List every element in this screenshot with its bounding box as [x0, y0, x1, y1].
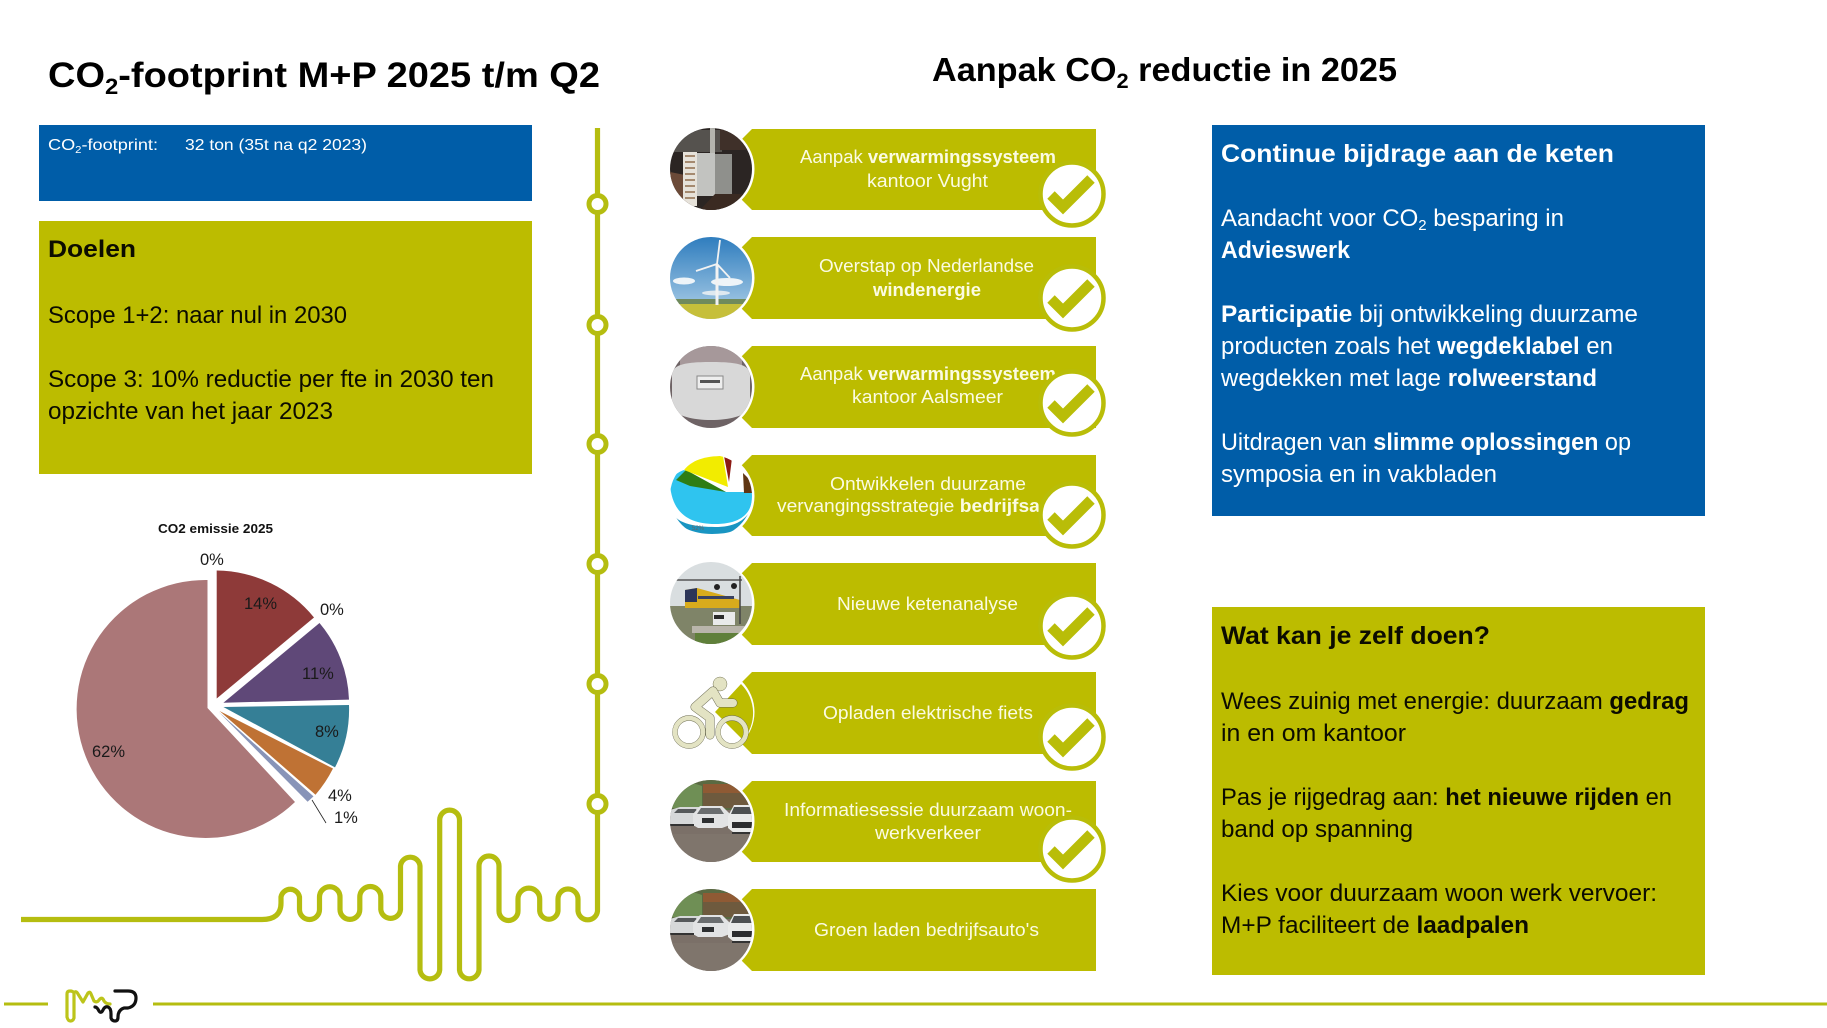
icon: check [1040, 162, 1104, 226]
paragraph: participatie: Participatie bij ontwikkeling duurzame [1221, 301, 1638, 328]
slice 1% [219, 712, 314, 802]
title: Aanpak CO2 reductie: reductie in 2025 [1129, 51, 1397, 88]
card 7: woon-werkverkeer [668, 778, 1104, 880]
paragraph: vervoer [1221, 880, 1657, 939]
footer line right [153, 1002, 1827, 1006]
title: CO2-footprint: CO [48, 56, 100, 95]
paragraph: symposia [1221, 429, 1631, 488]
label [800, 364, 1056, 407]
paragraph: advieswerk: besparing in [1427, 205, 1564, 232]
slice 11% [223, 623, 349, 703]
data labels: 4% [328, 787, 352, 805]
footprint label: 2 [75, 145, 82, 156]
data labels: 11% [302, 665, 334, 683]
card 1: verwarmingssysteem Vught [668, 126, 1104, 226]
label [777, 474, 1085, 516]
data labels [92, 551, 358, 827]
card 4: vervangingsstrategie [668, 452, 1104, 546]
icon: check [1040, 818, 1104, 880]
photo: boiler [670, 346, 752, 428]
label: Informatiesessie duurzaam woon- [784, 800, 1072, 820]
paragraph: vervoer: Kies voor duurzaam woon werk vervoer: [1221, 880, 1657, 907]
timeline wave line [21, 128, 598, 979]
data labels: 0% [200, 551, 224, 569]
label: Ontwikkelen duurzame [830, 474, 1026, 494]
paragraph: gedrag: Wees zuinig met energie: duurzaam gedrag [1221, 688, 1689, 715]
paragraph: gedrag [1221, 688, 1689, 747]
title: CO2-footprint: -footprint M+P 2025 t/m Q2 [118, 56, 600, 95]
card 8: bedrijfsauto's [668, 886, 1096, 974]
text: scope 3 [48, 366, 494, 425]
paragraph: participatie [1220, 301, 1638, 392]
icon: check [1040, 594, 1104, 658]
paragraph: rijgedrag [1221, 784, 1672, 843]
paragraph: rijgedrag: Pas je rijgedrag aan: het nieuwe rijden en [1221, 784, 1672, 811]
label: Groen laden bedrijfsauto's [814, 920, 1039, 940]
footprint value: 32 ton (35t na q2 2023) [185, 137, 367, 154]
label [784, 800, 1072, 843]
label: vervangingsstrategie bedrijfsauto's [777, 496, 1085, 516]
label: werkverkeer [874, 823, 981, 843]
heading: Wat kan je zelf doen? [1221, 622, 1490, 650]
paragraph: advieswerk: Advieswerk [1221, 237, 1351, 264]
paragraph: symposia: Uitdragen van slimme oplossingen op [1221, 429, 1631, 456]
panel: Wat kan je zelf doen [1212, 607, 1705, 975]
heading: Continue bijdrage aan de keten [1221, 140, 1614, 168]
photo: train [670, 562, 752, 646]
timeline nodes [589, 196, 606, 812]
paragraph: advieswerk: Aandacht voor CO [1221, 205, 1418, 232]
data labels: 62% [92, 743, 125, 761]
logo: M+P [67, 991, 136, 1021]
label: kantoor Aalsmeer [852, 387, 1003, 407]
label [819, 256, 1034, 300]
small pie label: 52% [692, 526, 705, 532]
label: Aanpak verwarmingssysteem [800, 147, 1056, 167]
data labels: 8% [315, 723, 339, 741]
card 3: verwarmingssysteem Aalsmeer [668, 344, 1104, 434]
card 6: elektrische fiets [668, 668, 1104, 768]
label [800, 147, 1056, 191]
panel: CO2-footprint value [39, 125, 532, 201]
photo: cars [670, 889, 752, 971]
footprint label: -footprint: [81, 137, 158, 154]
data labels: 0% [320, 601, 344, 619]
photo: wind turbine [670, 237, 752, 319]
label: windenergie [872, 280, 981, 300]
pie chart: CO2 emissie 2025 [77, 522, 358, 838]
card 2: windenergie [668, 234, 1104, 330]
footprint label: CO [48, 137, 72, 154]
photo: cars [670, 780, 752, 862]
slice 8% [223, 705, 349, 767]
icon: check [1040, 484, 1104, 546]
heading: Doelen: Doelen [48, 236, 136, 263]
title: CO2-footprint: 2 [105, 74, 118, 99]
text: scope 3: Scope 3: 10% reductie per fte in 2030 ten [48, 366, 494, 393]
paragraph: rijgedrag: band op spanning [1221, 816, 1413, 843]
image: 3D pie [670, 455, 752, 537]
data labels: 14% [244, 595, 277, 613]
icon: check [1040, 266, 1104, 330]
label: kantoor Vught [867, 171, 988, 191]
paragraph: advieswerk: 2 [1418, 217, 1427, 234]
title: Aanpak CO2 reductie: 2 [1117, 70, 1129, 93]
card 5: ketenanalyse [668, 560, 1104, 658]
label: Overstap op Nederlandse [819, 256, 1034, 276]
label: Aanpak verwarmingssysteem [800, 364, 1056, 384]
panel: Continue bijdrage aan de keten [1212, 125, 1705, 516]
paragraph: symposia: symposia en in vakbladen [1221, 461, 1497, 488]
text: scope 3: opzichte van het jaar 2023 [48, 398, 333, 425]
paragraph: participatie: wegdekken met lage rolweerstand [1220, 365, 1597, 392]
panel: Doelen [39, 221, 532, 474]
paragraph: advieswerk [1221, 205, 1564, 264]
leader line [312, 800, 326, 823]
text: scope 1+2: Scope 1+2: naar nul in 2030 [48, 302, 347, 329]
footer line left [4, 1002, 48, 1006]
icon: check [1040, 372, 1104, 434]
slice 4% [220, 711, 333, 795]
label: Nieuwe ketenanalyse [837, 594, 1018, 614]
title: Aanpak CO2 reductie: Aanpak CO [932, 51, 1110, 88]
slice 62% [77, 580, 295, 838]
chart title: CO2 emissie 2025 [158, 522, 273, 536]
paragraph: participatie: producten zoals het wegdeklabel en [1221, 333, 1613, 360]
data labels: 1% [334, 809, 358, 827]
label: Opladen elektrische fiets [823, 703, 1033, 723]
paragraph: gedrag: in en om kantoor [1221, 720, 1406, 747]
icon: cyclist [675, 677, 753, 746]
icon: check [1040, 706, 1104, 768]
slice 14% [217, 570, 314, 698]
photo: heat pump [670, 128, 752, 210]
paragraph: vervoer: M+P faciliteert de laadpalen [1221, 912, 1529, 939]
